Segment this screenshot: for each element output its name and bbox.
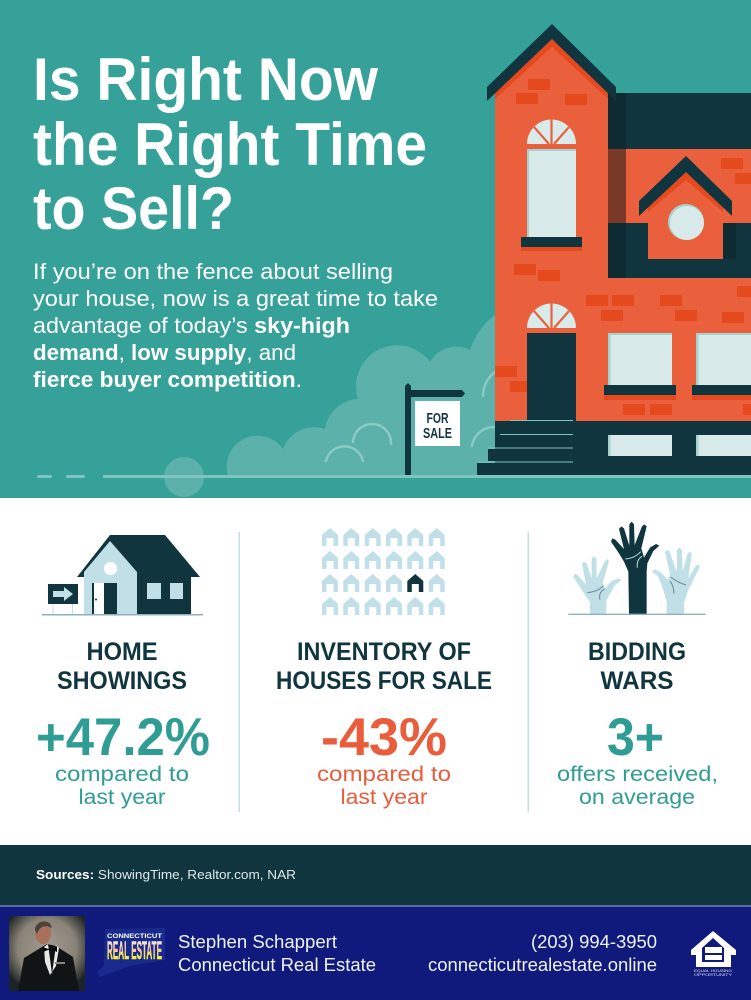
ground floor windows — [604, 333, 751, 400]
caption: last year — [78, 786, 166, 809]
title: Is Right Now — [33, 46, 378, 113]
stat: home showings — [36, 535, 210, 809]
logo: Connecticut Real Estate: CONNECTICUT — [107, 933, 162, 940]
number: -43% — [321, 708, 447, 767]
house — [477, 24, 751, 475]
heading: SHOWINGS — [57, 667, 187, 695]
contact details: (203) 994-3950 — [531, 932, 657, 952]
logo: Connecticut Real Estate — [97, 928, 165, 977]
heading — [588, 638, 686, 695]
heading: INVENTORY OF — [297, 638, 471, 666]
caption: last year — [340, 786, 428, 809]
palm lines — [587, 552, 686, 600]
stat: bidding wars — [557, 522, 718, 809]
caption — [557, 763, 718, 809]
intro text: your house, now is a great time to take — [33, 286, 438, 311]
tower arched window — [521, 118, 582, 251]
clouds — [164, 315, 495, 497]
intro text: advantage of today’s sky-high — [33, 313, 350, 338]
title: the Right Time — [33, 111, 427, 178]
heading: WARS — [600, 667, 674, 695]
intro text: demand, low supply, and — [33, 340, 296, 365]
for sale sign: FOR — [426, 411, 449, 427]
title — [33, 46, 427, 242]
icon: equal housing opportunity: OPPORTUNITY — [694, 973, 733, 977]
agent footer: REAL ESTATE — [107, 937, 162, 965]
icon: equal housing opportunity — [691, 931, 736, 977]
agent name: Stephen Schappert — [178, 932, 337, 952]
intro text: fierce buyer competition . — [33, 367, 302, 392]
heading — [276, 638, 492, 695]
center hand — [611, 522, 659, 614]
heading — [57, 638, 187, 695]
ground line — [37, 475, 751, 478]
icon: house with arrow sign — [42, 535, 203, 616]
stats panel — [0, 498, 751, 845]
tower — [487, 24, 616, 421]
icon: grid of houses — [322, 528, 445, 615]
heading: HOUSES FOR SALE — [276, 667, 492, 695]
for sale sign — [405, 383, 465, 475]
foundation and steps — [477, 420, 751, 475]
agent name — [178, 932, 376, 975]
sources bar — [0, 845, 751, 906]
caption — [317, 763, 451, 809]
caption: compared to — [317, 763, 451, 786]
dormer — [639, 156, 732, 259]
heading: BIDDING — [588, 638, 686, 666]
for sale sign: SALE — [423, 426, 452, 442]
caption — [55, 763, 189, 809]
intro text — [33, 259, 438, 392]
heading: HOME — [86, 638, 158, 666]
agent name: Connecticut Real Estate — [178, 955, 376, 975]
agent photo — [9, 916, 85, 991]
caption: offers received, — [557, 763, 718, 786]
right hand — [652, 548, 700, 614]
contact details — [428, 932, 657, 975]
contact details: connecticutrealestate.online — [428, 955, 657, 975]
agent footer — [0, 905, 751, 1000]
caption: compared to — [55, 763, 189, 786]
number: +47.2% — [36, 708, 210, 767]
title: to Sell? — [33, 175, 234, 242]
caption: on average — [579, 786, 695, 809]
icon: equal housing opportunity: EQUAL HOUSING — [694, 969, 732, 973]
door — [527, 302, 576, 423]
sources bar: Sources: ShowingTime, Realtor.com, NAR — [36, 867, 296, 882]
back wing — [608, 93, 751, 421]
intro text: If you’re on the fence about selling — [33, 259, 393, 284]
icon: raised hands — [568, 522, 706, 615]
stat: inventory — [276, 528, 492, 809]
number: 3+ — [607, 708, 664, 767]
cloud arcs — [326, 372, 495, 461]
bricks — [495, 79, 751, 415]
left hand — [573, 556, 622, 614]
hero panel — [0, 0, 751, 498]
